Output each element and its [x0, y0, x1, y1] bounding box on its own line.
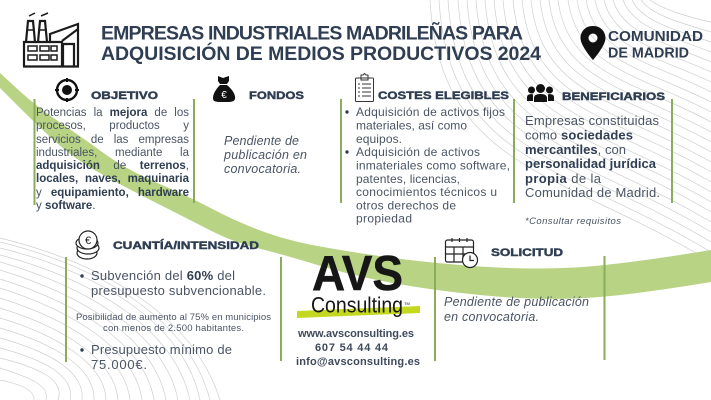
text: costes elegibles: materiales, así como	[356, 118, 467, 132]
text: costes elegibles: conocimientos técnicos u	[356, 185, 497, 199]
text: objetivo: y software.	[36, 200, 95, 212]
text: fondos: publicación en	[223, 148, 307, 162]
text: fondos: Pendiente de	[224, 134, 299, 148]
text: objetivo: locales, naves, maquinaria	[36, 173, 189, 185]
contact details	[296, 328, 420, 368]
text: objetivo: Potencias la mejora de los	[36, 107, 189, 119]
text: objetivo: adquisición de terrenos,	[36, 160, 189, 172]
text: cuantia: Subvención del 60% del	[91, 268, 235, 283]
note: consultar requisitos: *Consultar requisitos	[525, 216, 621, 227]
heading: costes elegibles: COSTES ELEGIBLES	[378, 90, 509, 102]
column dividers	[34, 99, 672, 362]
text: cuantia: con menos de 2.500 habitantes.	[103, 323, 244, 334]
heading: solicitud: SOLICITUD	[491, 247, 563, 259]
text: cuantia: Posibilidad de aumento al 75% en municipios	[76, 312, 271, 323]
icon: location pin	[580, 26, 606, 60]
text: solicitud: en convocatoria.	[444, 310, 539, 324]
green swoosh	[0, 73, 711, 299]
text: costes elegibles: patentes, licencias,	[356, 172, 460, 186]
contact details: www.avsconsulting.es	[297, 328, 414, 340]
text: beneficiarios: propia de la	[525, 171, 602, 186]
region label: COMUNIDAD	[608, 29, 703, 45]
region label	[608, 29, 703, 62]
text: cuantia: Presupuesto mínimo de	[91, 342, 232, 357]
logo: AVS Consulting: AVS	[312, 247, 403, 301]
text: beneficiarios	[525, 113, 660, 200]
heading: cuantia: CUANTÍA/INTENSIDAD	[113, 239, 259, 252]
text: beneficiarios: personalidad jurídica	[525, 156, 657, 171]
text: objetivo: y equipamiento, hardware	[36, 187, 189, 199]
icon: money bag	[213, 76, 235, 102]
title: EMPRESAS INDUSTRIALES MADRILEÑAS PARA	[101, 22, 523, 44]
text: cuantia: presupuesto subvencionable.	[91, 283, 266, 298]
contact details: info@avsconsulting.es	[296, 356, 420, 368]
icon: clipboard	[356, 74, 374, 102]
logo: AVS Consulting: Consulting	[311, 292, 403, 318]
text: beneficiarios: mercantiles, con	[525, 142, 626, 157]
text: objetivo: procesos, productos y	[36, 120, 189, 132]
text: costes elegibles: propiedad	[356, 212, 412, 226]
text: objetivo	[36, 107, 190, 212]
text: beneficiarios: como sociedades	[525, 128, 633, 142]
text: cuantia	[76, 268, 271, 372]
text: solicitud: Pendiente de publicación	[444, 295, 589, 309]
text: cuantia: 75.000€.	[91, 357, 147, 372]
text: solicitud	[444, 295, 589, 324]
logo: AVS Consulting	[297, 247, 420, 318]
heading: beneficiarios: BENEFICIARIOS	[562, 91, 665, 103]
title	[101, 22, 541, 65]
text: costes elegibles: inmateriales como software,	[356, 158, 510, 172]
text: costes elegibles: Adquisición de activos	[356, 145, 480, 159]
text: costes elegibles: equipos.	[356, 132, 402, 146]
heading: objetivo: OBJETIVO	[91, 90, 159, 102]
text: beneficiarios: Empresas constituidas	[525, 113, 660, 128]
text: costes elegibles: Adquisición de activos fijos	[356, 105, 505, 119]
text: costes elegibles	[345, 105, 510, 226]
text: fondos: convocatoria.	[224, 162, 301, 176]
icon: people	[527, 84, 554, 102]
text: fondos	[223, 134, 307, 176]
text: objetivo: industriales, mediante la	[36, 147, 189, 159]
text: objetivo: servicios de las empresas	[36, 134, 189, 146]
text: beneficiarios: Comunidad de Madrid.	[525, 185, 660, 200]
text: costes elegibles: otros derechos de	[356, 198, 456, 212]
icon: money bag: €	[221, 90, 227, 101]
icon: calendar	[446, 238, 478, 268]
icon: factory	[23, 13, 79, 66]
heading: fondos: FONDOS	[249, 90, 304, 102]
region label: DE MADRID	[608, 46, 689, 62]
title: ADQUISICIÓN DE MEDIOS PRODUCTIVOS 2024	[101, 41, 541, 65]
icon: coins	[76, 231, 99, 259]
logo: AVS Consulting: TM	[404, 301, 410, 306]
icon: target	[55, 78, 79, 102]
contact details: 607 54 44 44	[315, 342, 389, 354]
icon: coins: €	[85, 235, 91, 247]
